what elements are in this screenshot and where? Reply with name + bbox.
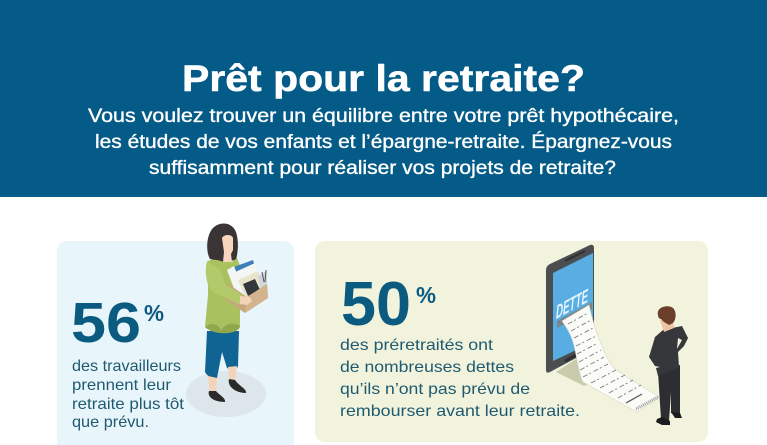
receipt paper	[562, 305, 660, 412]
intro paragraph: les études de vos enfants et l’épargne-retraite. Épargnez-vous	[95, 132, 672, 153]
panel: 50 percent debts	[315, 241, 708, 442]
statistic description: qu’ils n’ont pas prévu de	[340, 381, 530, 398]
header banner	[0, 0, 767, 197]
statistic description: que prévu.	[72, 414, 149, 431]
intro paragraph: suffisamment pour réaliser vos projets de retraite?	[149, 158, 616, 179]
intro paragraph	[88, 106, 679, 179]
statistic description: retraite plus tôt	[72, 396, 185, 413]
statistic 56%: %	[144, 300, 164, 326]
statistic description	[340, 337, 580, 420]
statistic description: rembourser avant leur retraite.	[340, 403, 580, 420]
DETTE label on screen: DETTE	[556, 285, 589, 324]
statistic description: prennent leur	[72, 377, 172, 394]
intro paragraph: Vous voulez trouver un équilibre entre votre prêt hypothécaire,	[88, 106, 679, 127]
cardboard box contents	[231, 260, 260, 293]
illustration: man in a suit	[649, 306, 688, 425]
illustration: woman carrying a box	[186, 223, 268, 417]
statistic description: des préretraités ont	[340, 337, 494, 354]
statistic 50%: 50	[341, 270, 411, 339]
panel: 56 percent early retirement	[57, 223, 294, 445]
arm and hand	[206, 261, 244, 305]
statistic 50%: %	[416, 282, 436, 308]
statistic description: des travailleurs	[72, 358, 181, 375]
statistic description	[72, 358, 185, 431]
title: Prêt pour la retraite?	[182, 58, 585, 99]
statistic description: de nombreuses dettes	[340, 359, 514, 376]
illustration: smartphone with debt receipt	[546, 245, 660, 412]
statistic 56%: 56	[71, 291, 141, 355]
statistic 56%	[71, 291, 164, 355]
